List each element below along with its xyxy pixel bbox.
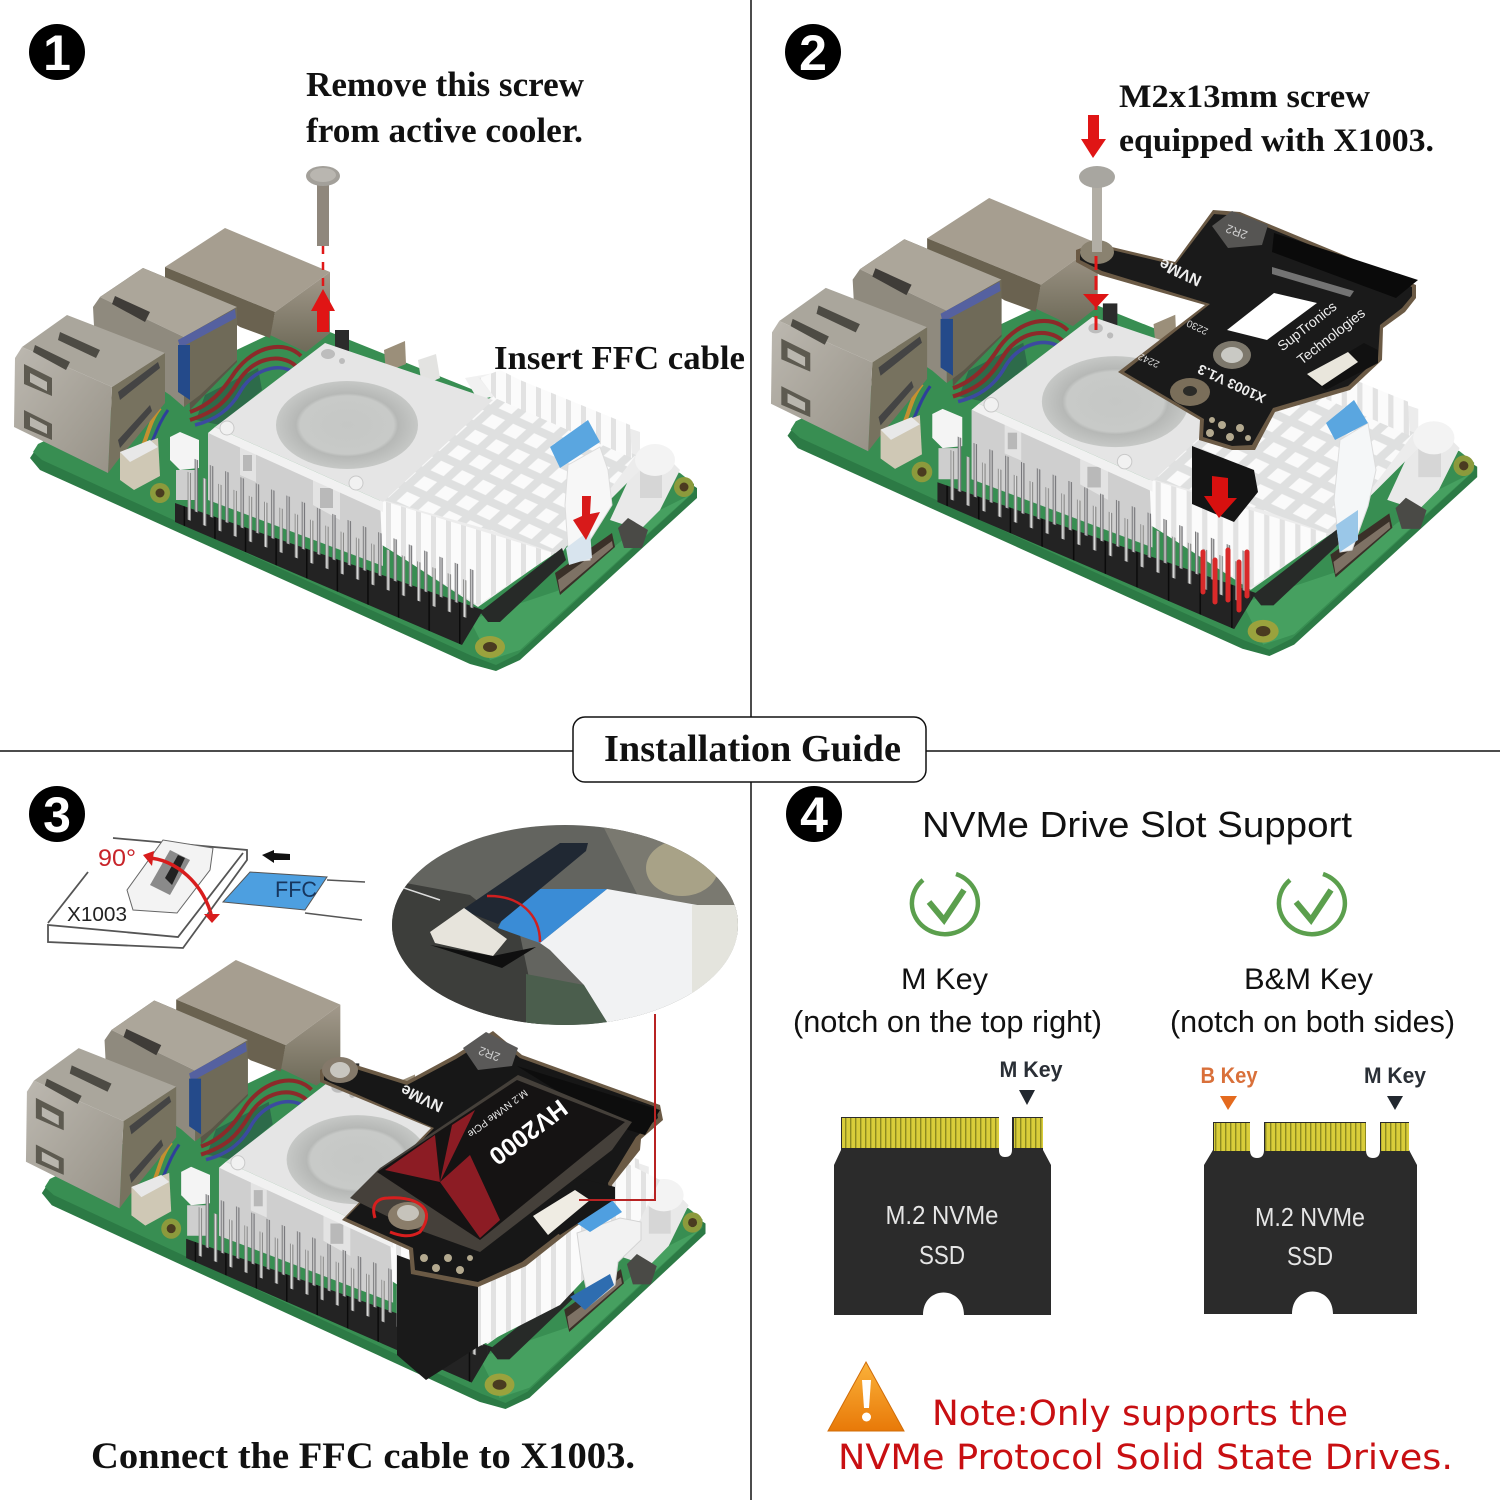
red leader line [579,1014,655,1200]
heading: NVMe Drive Slot Support [922,804,1352,845]
SSD screw [388,1202,428,1230]
plate outline [48,838,247,948]
FFC label: FFC [275,877,317,902]
mounting screw [1170,378,1210,406]
step badge 3: 3 [43,787,71,843]
PCB strip of SSD [350,1075,632,1252]
raspberry pi board with active cooler [26,960,706,1409]
step badge 4 [786,786,842,843]
inductor [1212,211,1268,248]
board label 2242: 2242 [1136,350,1161,369]
instruction text second line: equipped with X1003. [1119,123,1434,159]
icon: green check M key [912,874,978,934]
B&amp;M key note: (notch on both sides) [1170,1004,1455,1039]
FFC label: Insert FFC cable [494,340,745,377]
B&amp;M key SSD card [1204,1122,1417,1314]
inductor: 2R2 [1224,221,1249,242]
M.2 socket [1272,233,1418,298]
blue FFC end at socket [575,1200,622,1232]
mounting screw hole [1213,341,1251,369]
black pin socket [1192,446,1258,522]
icon: green check B&amp;M key [1279,874,1345,934]
icon: B key marker [1220,1096,1237,1110]
board label 2230: 2230 [1185,317,1210,336]
pads [420,1254,473,1274]
icon: small red down triangle [1083,294,1109,308]
board label NVMe: NVMe [398,1080,446,1115]
instruction text second line: from active cooler. [306,111,583,150]
screw at arm [322,1057,358,1083]
gold contacts right [1381,1123,1409,1151]
card label SSD: SSD [1287,1241,1333,1271]
SSD label face [377,1080,625,1240]
panel: step 1 remove screw and insert FFC [14,24,745,671]
note line two: NVMe Protocol Solid State Drives. [838,1438,1453,1478]
step badge 1: 1 [43,25,71,81]
raspberry pi board with active cooler [14,228,697,671]
raspberry pi board with active cooler [771,198,1477,656]
FFC cable [550,420,612,565]
arc head start [143,851,154,866]
icon: M key marker [1019,1090,1035,1105]
ribbon lines [305,880,365,920]
icon: red curved arrow in lens [487,896,540,942]
SSD title: HV2000 [483,1094,573,1170]
step badge 2 [785,24,841,81]
SSD subtitle: M.2 NVMe PCIe [465,1087,529,1139]
panel: step 2 attach X1003 board [771,24,1477,656]
card label: M.2 NVMe [1255,1202,1365,1232]
X1003 NVMe adapter board [1076,210,1418,450]
FFC cable loop [570,1218,641,1310]
step badge 4: 4 [800,787,828,843]
instruction text: Remove this screw [306,65,585,104]
panel: step 3 connect FFC [26,786,742,1477]
M key callout right: M Key [1364,1063,1427,1088]
heatsink stripes beside socket [478,1160,660,1347]
panel: step 4 NVMe drive slot support [786,786,1455,1478]
icon: red rotation arrow [374,1198,427,1236]
icon: red arrow on socket [1204,476,1237,518]
FFC socket on board [533,1178,615,1235]
inductor: 2R2 [476,1043,502,1064]
B&amp;M key label: B&M Key [1244,963,1373,996]
board label Technologies: Technologies [1294,305,1368,368]
title box [573,717,926,782]
X1003 adapter board with SSD [320,1031,663,1287]
icon: black arrow pointing left [262,850,290,863]
B key callout: B Key [1200,1063,1258,1088]
dashed red guide line [322,246,324,290]
card label SSD: SSD [919,1240,965,1270]
board label SupTronics: SupTronics [1274,298,1340,354]
gold contacts left [1214,1123,1250,1151]
caption: Connect the FFC cable to X1003. [91,1436,635,1477]
zoomed lens: FFC connector [390,820,742,1030]
pads [1206,417,1251,441]
icon: M key marker right [1387,1096,1403,1110]
screw removed from cooler [306,166,340,246]
step badge 3 [29,786,85,843]
board label X1003: X1003 V1.3 [1195,361,1268,407]
icon: red 90 degree arc [147,858,212,918]
inductor [463,1032,518,1070]
step badge 1 [29,24,85,81]
90 degree label: 90° [98,845,136,872]
black header socket under module [397,1255,478,1380]
gold contacts middle [1265,1123,1366,1151]
M.2 socket [517,1066,660,1135]
icon: red arrow pointing down [1081,115,1106,158]
FFC cable [1326,400,1376,552]
dashed red guide line [1094,256,1098,330]
gold contacts [842,1118,999,1148]
FFC cable blue end [223,872,327,910]
X1003 label: X1003 [67,904,127,926]
arc head end [204,914,220,923]
icon: warning triangle [828,1362,904,1431]
screw M2x13mm [1079,166,1115,264]
connector sketch [127,840,213,913]
connector diagram X1003 [48,838,365,948]
red highlighted pins [1203,550,1247,610]
M key note: (notch on the top right) [793,1004,1102,1039]
icon: red arrow pointing up [311,289,335,332]
M key callout: M Key [1000,1057,1063,1082]
instruction text: M2x13mm screw [1119,79,1370,115]
board label NVMe: NVMe [1157,255,1204,289]
M key SSD card [834,1117,1051,1315]
M key label: M Key [901,963,988,996]
step badge 2: 2 [799,25,827,81]
icon: red arrow pointing down into connector [573,496,600,540]
gold contacts short [1014,1118,1043,1148]
note line one: Note:Only supports the [932,1394,1348,1434]
FFC socket [1307,343,1378,390]
slot cutout [1227,293,1317,340]
card label: M.2 NVMe [886,1200,998,1230]
title: Installation Guide [604,728,901,770]
SSD red rays [385,1110,500,1238]
